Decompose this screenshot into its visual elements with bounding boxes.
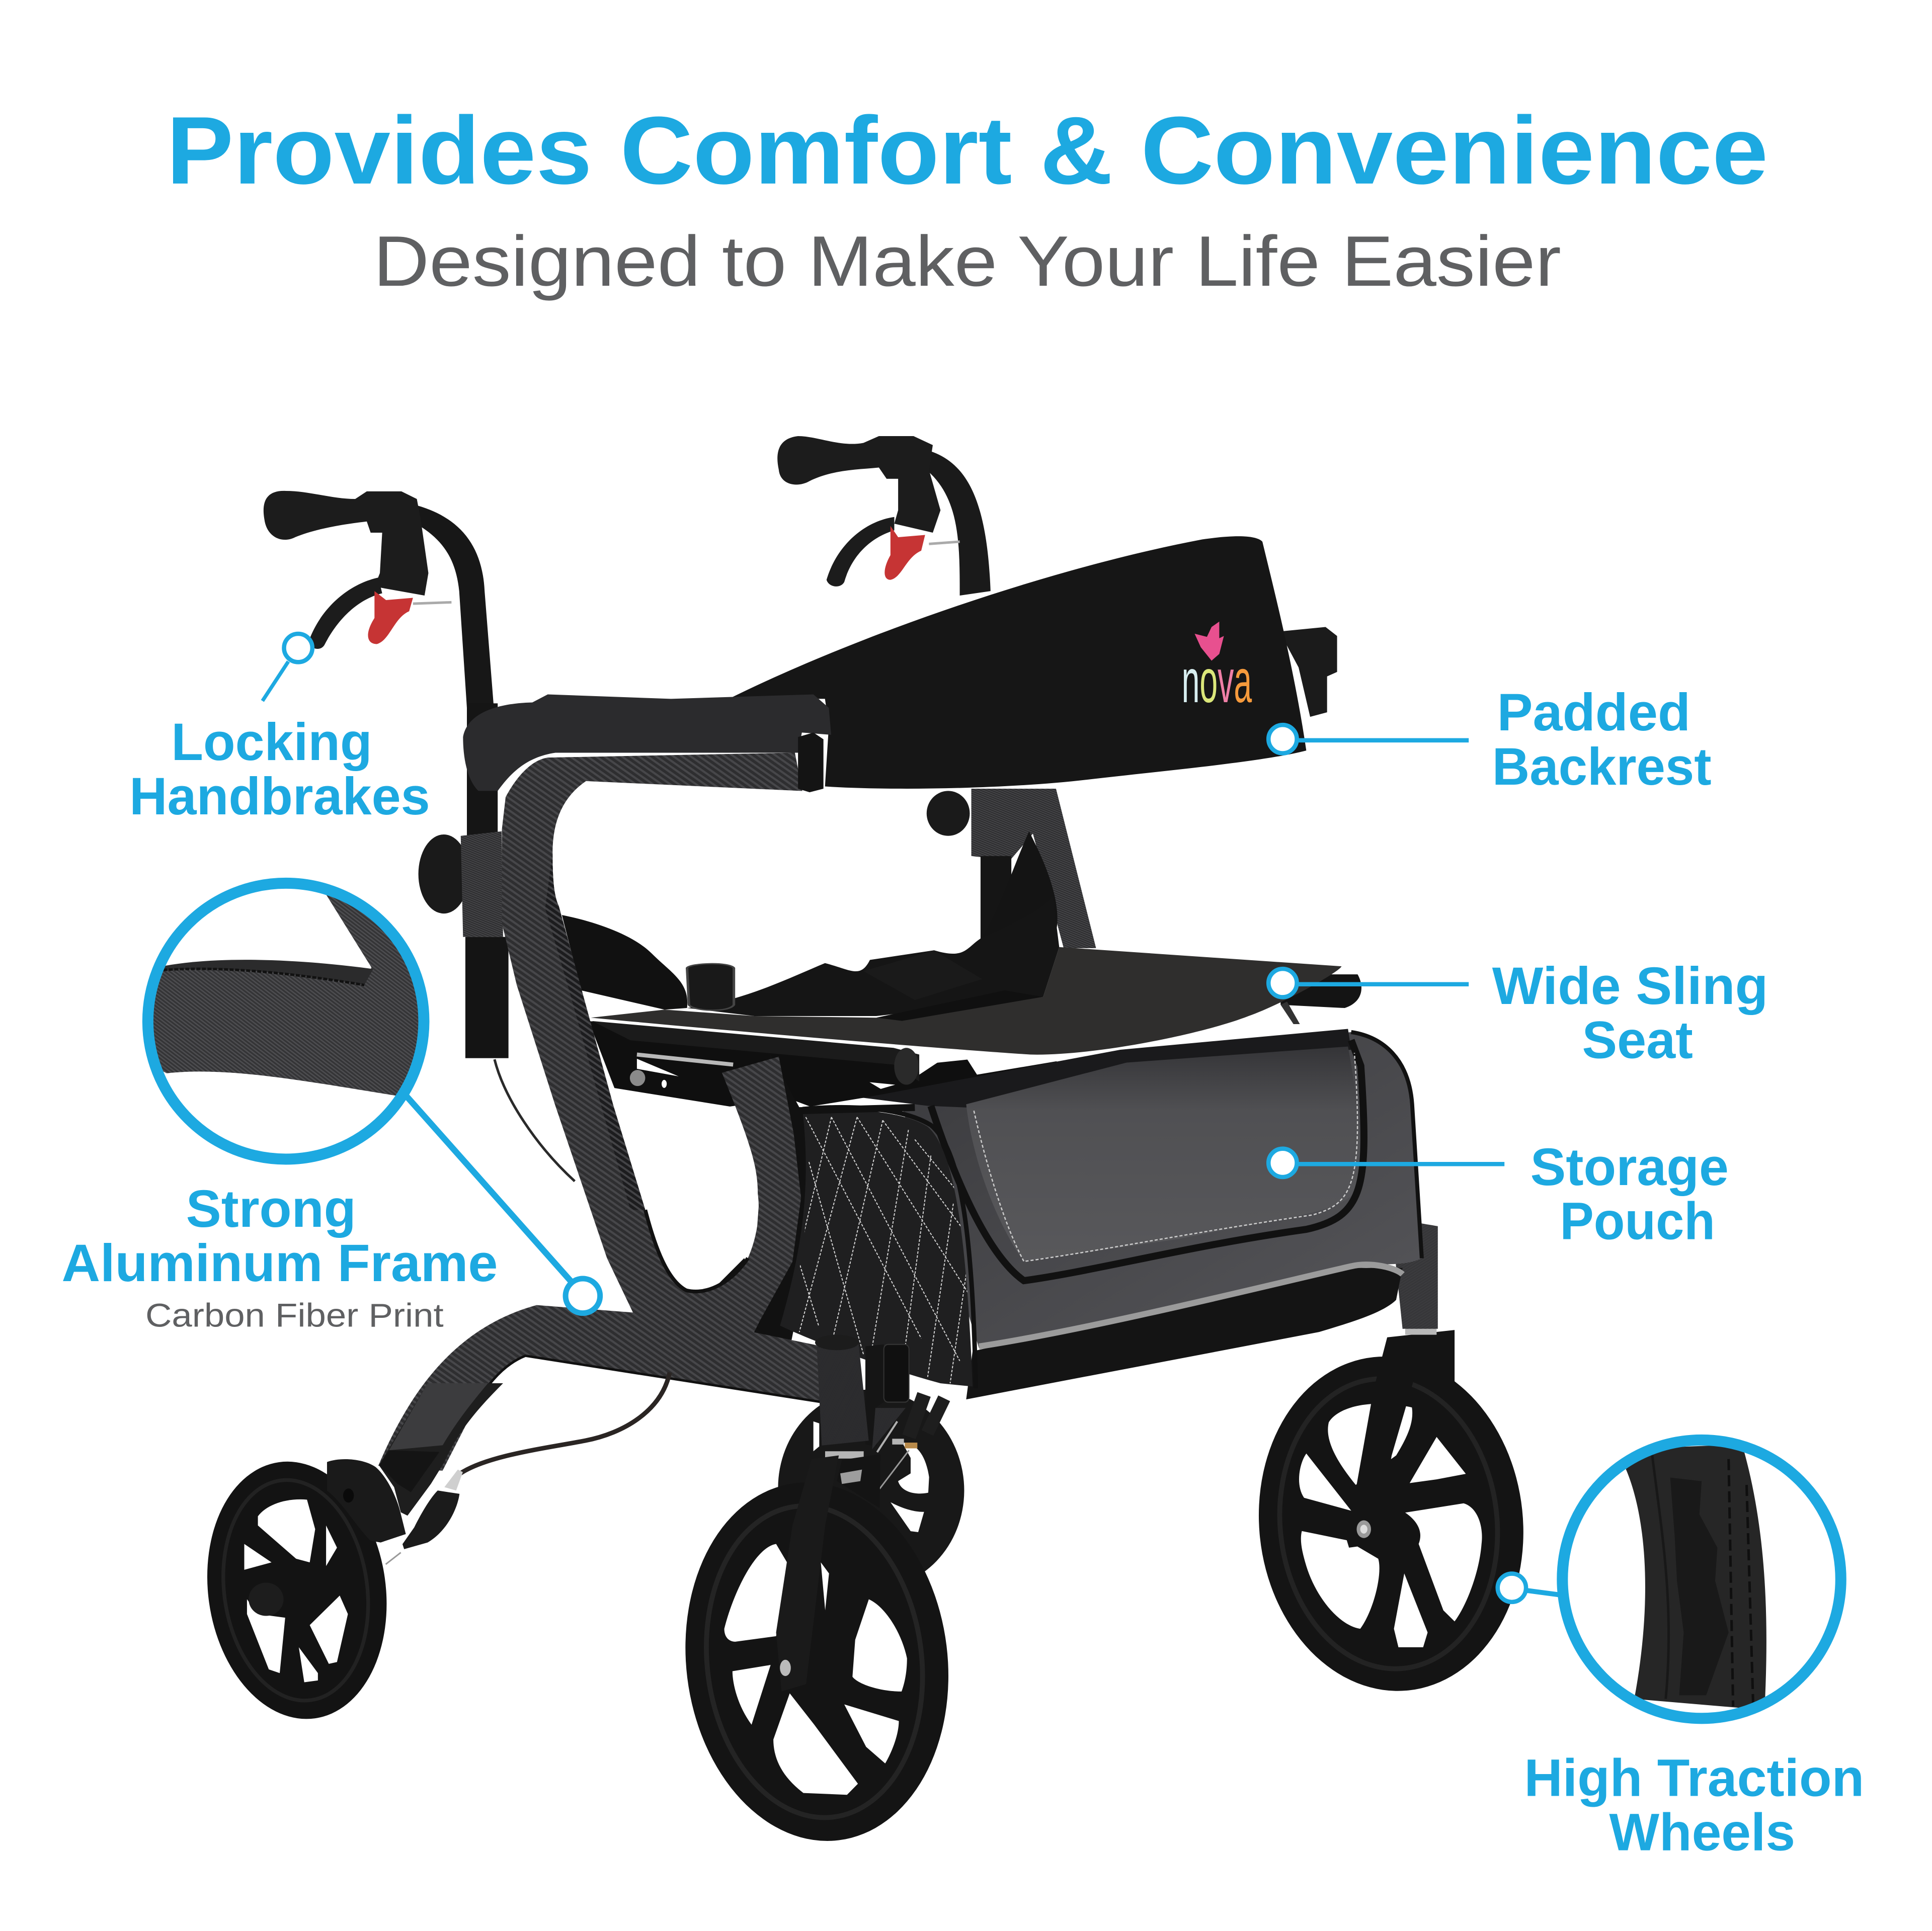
label: high traction wheels: High Traction bbox=[1524, 1749, 1864, 1808]
pouch base fabric bbox=[966, 1268, 1403, 1399]
connector line bbox=[407, 1097, 573, 1284]
label: storage pouch: Pouch bbox=[1560, 1192, 1715, 1251]
carbon fiber main frame bbox=[378, 752, 826, 1471]
label: high traction wheels bbox=[1524, 1749, 1864, 1862]
pouch top bbox=[863, 1029, 1351, 1108]
far rear wheel bbox=[770, 1382, 973, 1597]
pouch body bbox=[902, 1032, 1422, 1348]
seat mechanism bbox=[589, 1021, 1061, 1107]
tire tread detail bbox=[1623, 1444, 1766, 1710]
callout: high traction wheels magnifier bbox=[1498, 1440, 1841, 1718]
pouch flap bbox=[966, 1047, 1360, 1262]
label: storage pouch bbox=[1531, 1138, 1729, 1251]
magnifier ring bbox=[1562, 1440, 1841, 1718]
subtitle: Designed to Make Your Life Easier bbox=[373, 221, 1561, 301]
label: padded backrest bbox=[1492, 683, 1712, 796]
far brake cable bbox=[495, 1059, 575, 1181]
label: wide sling seat: Wide Sling bbox=[1492, 957, 1768, 1016]
nova logo: nova bbox=[1182, 646, 1252, 715]
seat straps and buckles bbox=[562, 896, 1059, 1021]
label: strong aluminum frame bbox=[61, 1180, 498, 1334]
label: storage pouch: Storage bbox=[1531, 1138, 1729, 1197]
callout: wide sling seat pointer bbox=[1268, 969, 1469, 997]
callout: locking handbrakes pointer bbox=[263, 634, 312, 701]
quilted side panel bbox=[780, 1110, 973, 1387]
right fork and post bbox=[1347, 1328, 1455, 1548]
label: wide sling seat bbox=[1492, 957, 1768, 1070]
front post, clip and brake hoses bbox=[815, 1335, 944, 1489]
label: high traction wheels: Wheels bbox=[1609, 1803, 1795, 1862]
label: strong aluminum frame: Aluminum Frame bbox=[61, 1234, 498, 1293]
label: locking handbrakes bbox=[129, 713, 430, 826]
front caster wheel bbox=[191, 1450, 403, 1731]
storage pouch bbox=[780, 1029, 1422, 1399]
label: locking handbrakes: Handbrakes bbox=[129, 767, 430, 826]
dark edge behind frame bbox=[749, 1053, 818, 1342]
label: locking handbrakes: Locking bbox=[171, 713, 372, 772]
near handle and locking handbrake bbox=[264, 491, 509, 1058]
reflective strip bbox=[979, 1265, 1403, 1347]
right rear wheel bbox=[1242, 1344, 1540, 1704]
callout: strong aluminum frame magnifier bbox=[142, 883, 600, 1313]
callout: storage pouch pointer bbox=[1268, 1149, 1504, 1177]
marker dot bbox=[1498, 1574, 1526, 1602]
rollator walker product photo bbox=[191, 436, 1540, 1856]
far handle and brake bbox=[777, 436, 991, 596]
marker dot bbox=[566, 1279, 600, 1313]
caster hub and brake cable bbox=[249, 1372, 670, 1616]
label: padded backrest: Padded bbox=[1497, 683, 1691, 742]
label: wide sling seat: Seat bbox=[1582, 1011, 1693, 1070]
connector line bbox=[1525, 1590, 1562, 1595]
armrest bbox=[463, 694, 831, 792]
caster fender, frame end and brake housing bbox=[327, 1383, 503, 1564]
magnifier ring bbox=[148, 883, 424, 1159]
back support and knob bbox=[927, 627, 1337, 968]
label: strong aluminum frame: Carbon Fiber Print bbox=[145, 1297, 444, 1334]
front wheel bbox=[665, 1467, 969, 1856]
padded backrest bbox=[729, 536, 1306, 789]
wide sling seat bbox=[591, 947, 1361, 1055]
carbon fiber detail bbox=[142, 894, 431, 1096]
callout: padded backrest pointer bbox=[1268, 725, 1469, 753]
title: Provides Comfort & Convenience bbox=[167, 97, 1768, 204]
label: strong aluminum frame: Strong bbox=[186, 1180, 356, 1238]
label: padded backrest: Backrest bbox=[1492, 737, 1712, 796]
front fork bbox=[776, 1451, 880, 1692]
